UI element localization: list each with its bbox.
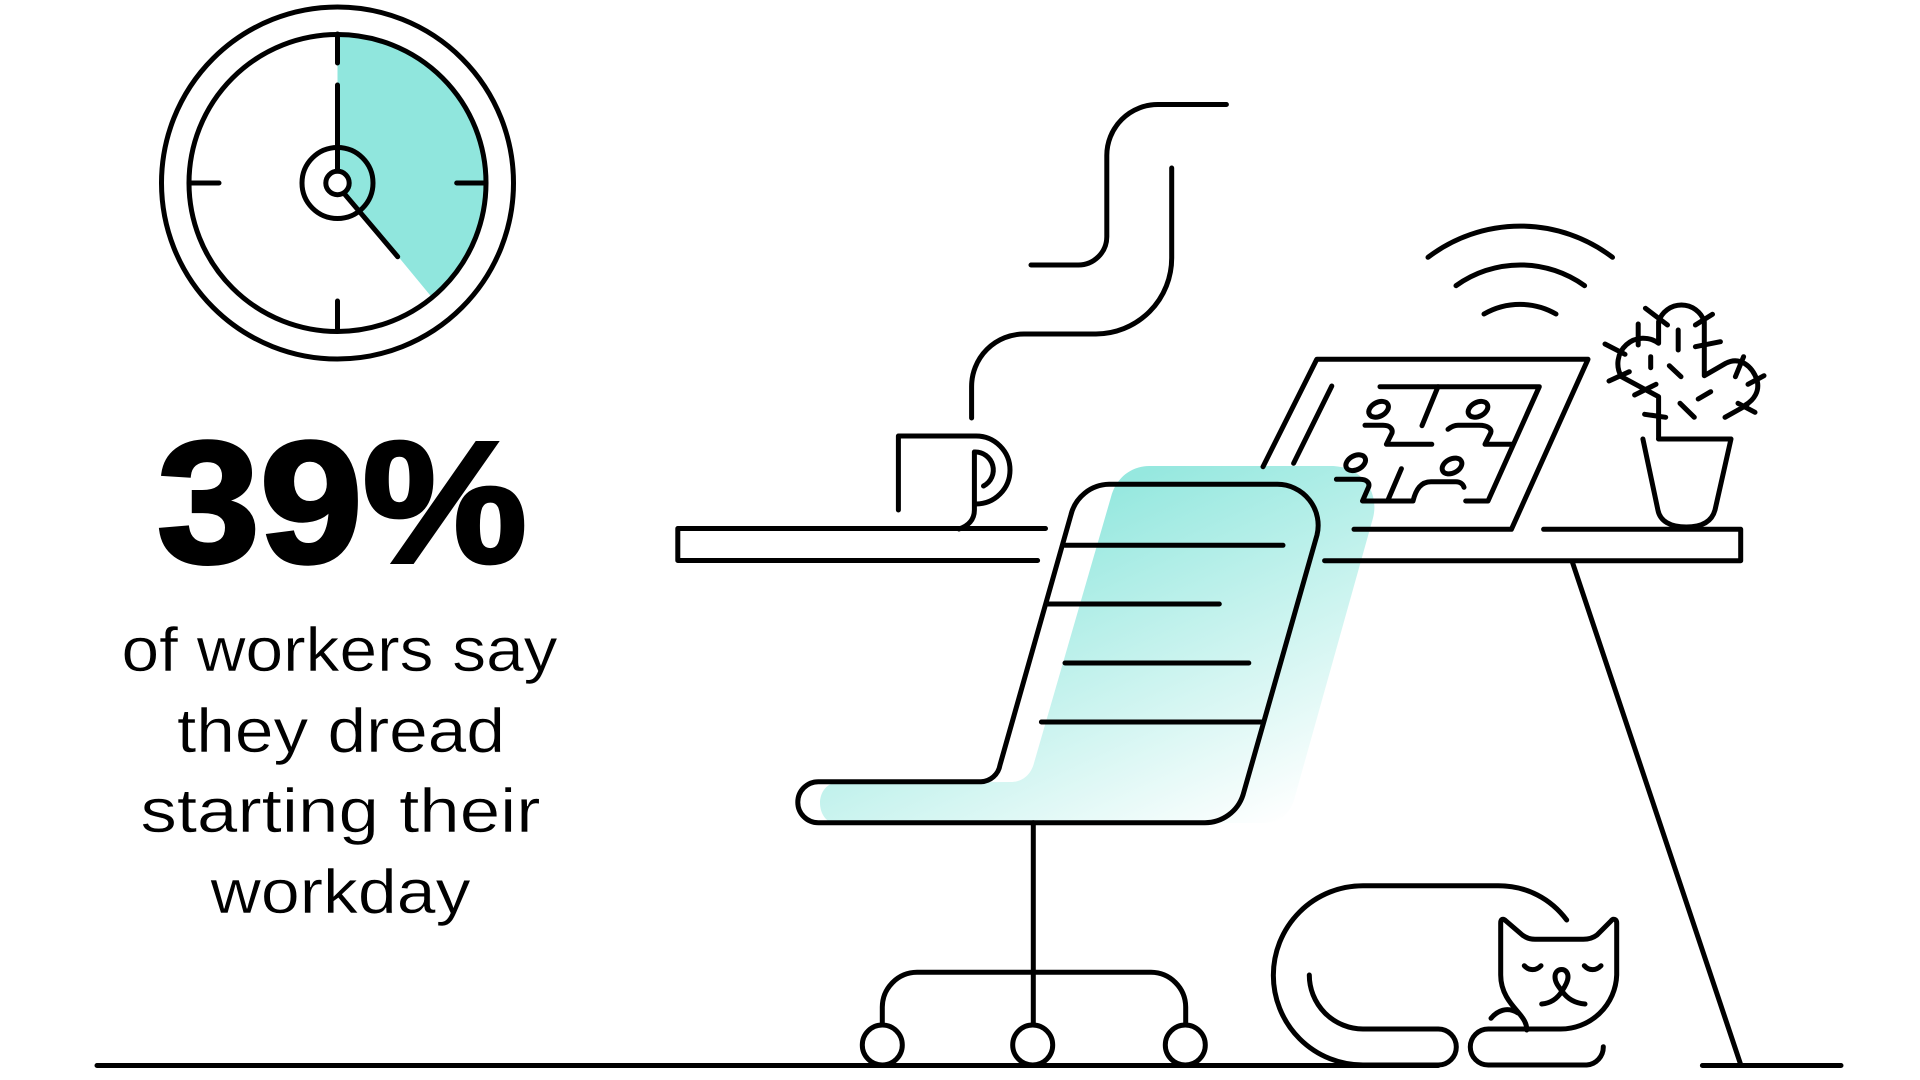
headline: 39%: 39%	[157, 405, 527, 599]
text block: description: they dread	[177, 697, 505, 766]
laptop screen with video call	[1336, 387, 1539, 501]
icon: sleeping cat	[1273, 886, 1617, 1065]
pot	[1643, 439, 1731, 527]
text block: description: of workers say	[122, 616, 558, 685]
clock wedge	[338, 34, 487, 297]
cactus outline	[1618, 305, 1758, 439]
laptop	[1263, 359, 1588, 529]
chair slats	[1041, 545, 1283, 722]
cactus spikes	[1605, 308, 1764, 417]
cat head and front paw	[1470, 919, 1617, 1065]
chair wheels	[862, 1025, 902, 1065]
cat eyes	[1524, 966, 1601, 970]
cat body	[1273, 886, 1567, 1065]
chair outline	[798, 484, 1318, 823]
cat hind paw	[1491, 1010, 1518, 1018]
cat nose and mouth	[1542, 970, 1585, 1004]
icon: potted cactus	[1605, 305, 1764, 527]
desk	[678, 528, 1741, 1066]
icon: mug	[898, 436, 1010, 529]
clock ticks	[189, 34, 486, 331]
steam from mug	[972, 104, 1226, 418]
chair stem	[1031, 823, 1036, 1024]
office chair	[798, 484, 1318, 1065]
floor line	[97, 1063, 1841, 1068]
clock face rings	[162, 7, 514, 359]
text block: description	[122, 616, 558, 927]
text block: description: starting their	[140, 777, 540, 846]
icon: clock showing 39 percent wedge	[162, 7, 514, 359]
clock hands	[338, 85, 398, 257]
desk leg	[1572, 561, 1741, 1066]
chair base	[882, 972, 1186, 1024]
text block: description: workday	[209, 858, 471, 927]
chair shadow: teal gradient shape	[820, 466, 1374, 823]
icon: wifi signal	[1428, 226, 1612, 314]
